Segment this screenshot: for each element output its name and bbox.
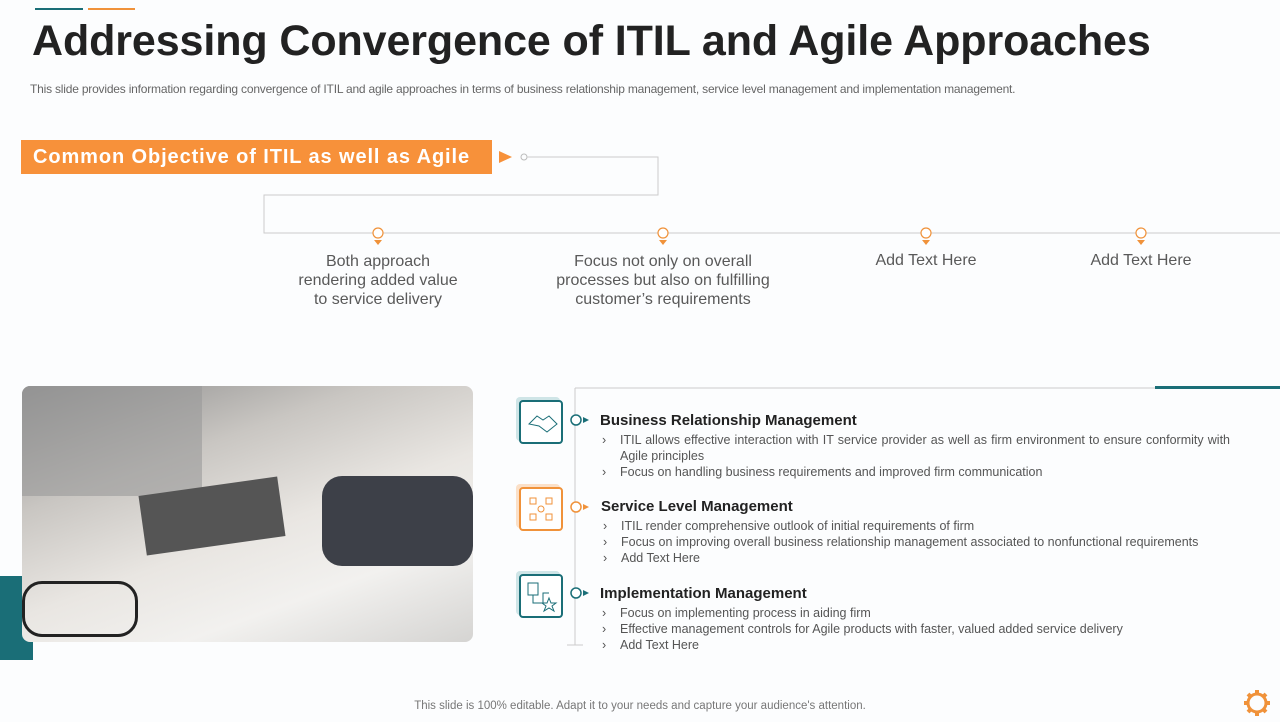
- section: implementation management: Add Text Here: [620, 638, 699, 652]
- objective 2: Focus not only on overall processes but also on fulfilling customer’s requirements: [556, 253, 770, 308]
- section: business relationship management: ITIL allows effective interaction with IT service provider as well as firm environment to ensure conformity with Agile principles: [620, 433, 1230, 463]
- objective 1: Both approach rendering added value to service delivery: [298, 253, 458, 308]
- top accent lines: [35, 8, 135, 10]
- title: Addressing Convergence of ITIL and Agile Approaches: [32, 17, 1151, 65]
- subtitle: This slide provides information regarding convergence of ITIL and agile approaches in terms of business relationship management, service level management and implementation management.: [30, 82, 1015, 96]
- section: implementation management: Effective management controls for Agile products with faster, valued added service delivery: [620, 622, 1123, 636]
- section: implementation management: [600, 585, 1123, 652]
- teal side bar: [0, 576, 33, 660]
- objective 3: Add Text Here: [875, 252, 977, 269]
- orange banner: [21, 140, 492, 174]
- icon: implementation: [519, 574, 563, 618]
- section: service level management: ITIL render comprehensive outlook of initial requirements of firm: [621, 519, 974, 533]
- section: implementation management: Focus on implementing process in aiding firm: [620, 606, 871, 620]
- photo: [22, 386, 473, 642]
- section: service level management: Add Text Here: [621, 551, 700, 565]
- section: business relationship management: Business Relationship Management: [600, 412, 857, 429]
- objective 4: Add Text Here: [1090, 252, 1192, 269]
- icon: gear: [1244, 690, 1270, 716]
- orange banner: Common Objective of ITIL as well as Agile: [33, 146, 470, 168]
- footer: This slide is 100% editable. Adapt it to your needs and capture your audience's attention.: [414, 700, 866, 712]
- section: implementation management: Implementation Management: [600, 585, 807, 602]
- section: service level management: Service Level Management: [601, 498, 793, 515]
- section: business relationship management: [600, 412, 1230, 479]
- icon: handshake: [519, 400, 563, 444]
- icon: network: [519, 487, 563, 531]
- section: service level management: [601, 498, 1198, 565]
- section: business relationship management: Focus on handling business requirements and improved firm communication: [620, 465, 1042, 479]
- section: service level management: Focus on improving overall business relationship management associated to nonfunctional requirements: [621, 535, 1198, 549]
